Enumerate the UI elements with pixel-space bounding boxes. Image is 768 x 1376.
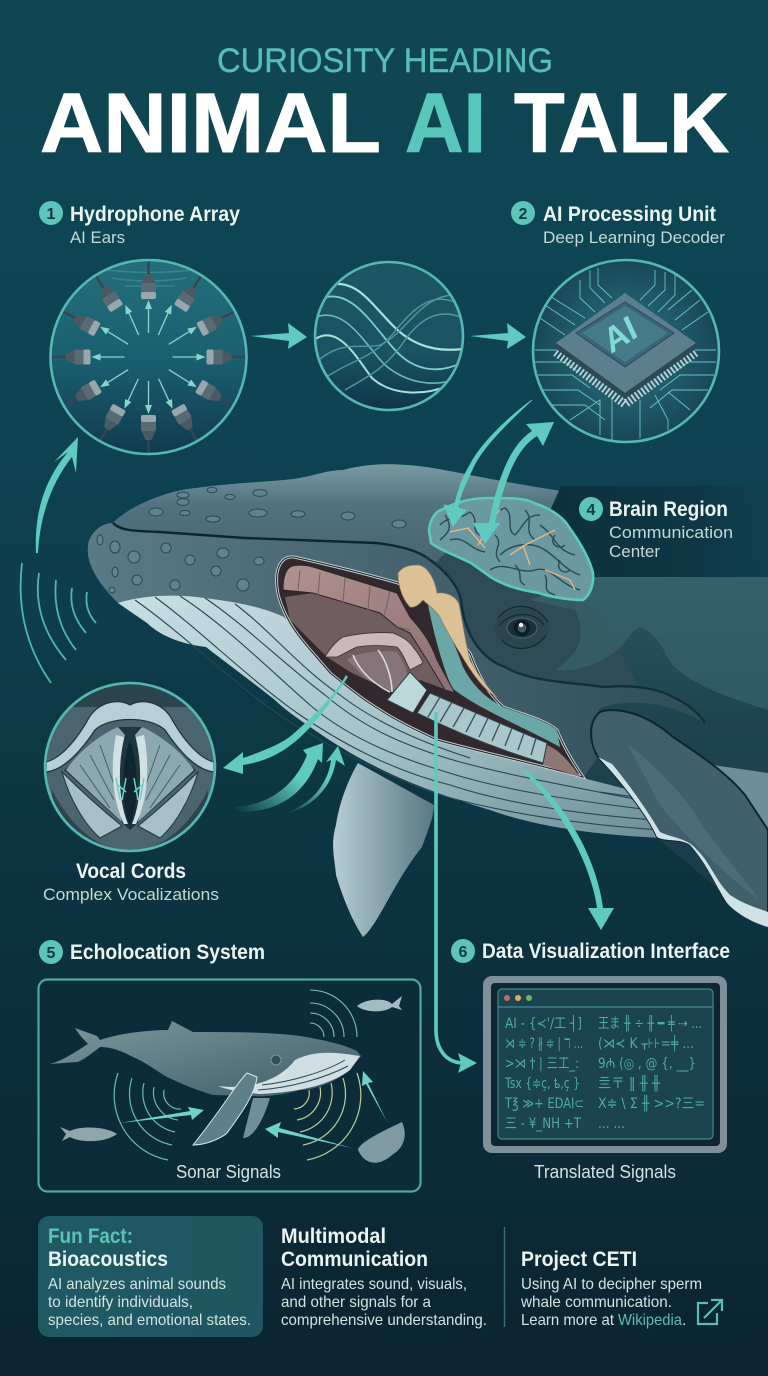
lung pink bbox=[283, 565, 455, 693]
right pleats behind fin bbox=[713, 765, 768, 835]
arrow: trachea to data interface bbox=[436, 712, 462, 1063]
label: vocal cords: Complex Vocalizations bbox=[43, 885, 219, 904]
translated signal glyph rows: Tsx {≑ç, ҍ,ç } bbox=[504, 1076, 580, 1092]
upper jaw bbox=[113, 464, 561, 562]
arrow: vocal cords to whale, thick bbox=[235, 743, 323, 812]
label 4: brain region: 4 bbox=[587, 502, 596, 519]
panel: waveform circle bbox=[314, 262, 463, 410]
translated signal glyph rows: 三 - ¥_NH +T bbox=[505, 1116, 581, 1132]
sonar arcs top bbox=[310, 990, 357, 1037]
label 1: hydrophone array: Hydrophone Array bbox=[70, 203, 240, 226]
label: vocal cords bbox=[43, 860, 219, 904]
teal channel bbox=[427, 600, 560, 747]
eye bbox=[495, 606, 549, 648]
arrow: waveform to processor bbox=[470, 323, 526, 349]
heading: curiosity heading: CURIOSITY HEADING bbox=[217, 42, 553, 80]
text block: multimodal communication: AI integrates sound, visuals, bbox=[281, 1276, 467, 1293]
panel: hydrophone array circle bbox=[50, 260, 246, 454]
vocal folds inside bbox=[325, 632, 423, 670]
head outline band bbox=[426, 557, 705, 723]
label 1: hydrophone array bbox=[39, 201, 240, 247]
text block: project ceti: whale communication. bbox=[520, 1294, 672, 1311]
translated signal glyph rows: ⋊ ≑ ? ∦ ≑ | ℸ ... bbox=[505, 1036, 583, 1052]
arrow: hydrophones to waveform bbox=[251, 323, 307, 349]
text block: multimodal communication: Communication bbox=[281, 1248, 428, 1271]
illustration: whale cross-section bbox=[88, 464, 768, 937]
interior mauve bbox=[285, 593, 455, 693]
sperm whale bbox=[358, 1122, 405, 1163]
brain region bbox=[429, 498, 593, 600]
panel: fun fact bioacoustics: Bioacoustics bbox=[48, 1248, 168, 1271]
text block: project ceti: Using AI to decipher sperm bbox=[521, 1276, 702, 1293]
title: animal ai talk: ANIMAL bbox=[40, 76, 381, 170]
label 1: hydrophone array: AI Ears bbox=[70, 228, 125, 247]
panel: ai chip circle: AI bbox=[598, 308, 643, 362]
lower folds bbox=[347, 651, 407, 690]
panel: echolocation system bbox=[38, 980, 420, 1192]
whale body bbox=[88, 464, 768, 930]
panel: fun fact bioacoustics: AI analyzes animal sounds bbox=[48, 1276, 226, 1293]
caption: translated signals: Translated Signals bbox=[534, 1162, 676, 1182]
label 2: ai processing unit: Deep Learning Decoder bbox=[543, 228, 725, 247]
sonar arcs right bbox=[294, 1073, 361, 1160]
pectoral fin bbox=[591, 710, 768, 927]
text block: project ceti: Learn more at bbox=[521, 1312, 615, 1329]
panel: data visualization screen bbox=[483, 976, 727, 1153]
label 5: echolocation: 5 bbox=[47, 945, 56, 962]
caption: sonar signals: Sonar Signals bbox=[176, 1162, 281, 1182]
fish top bbox=[357, 996, 402, 1011]
arrow: up to whale head bbox=[362, 1071, 387, 1122]
arrow: pleats to data interface bbox=[524, 770, 614, 930]
head side near eye bbox=[426, 530, 640, 690]
label 4: brain region bbox=[579, 497, 733, 561]
lower jaw bbox=[88, 523, 705, 778]
text block: multimodal communication: Multimodal bbox=[281, 1225, 386, 1248]
text block: multimodal communication: and other signals for a bbox=[281, 1294, 431, 1311]
flipper: lower fin bbox=[333, 763, 434, 937]
arrow: whale sound up to hydrophones bbox=[36, 437, 78, 553]
panel: fun fact bioacoustics bbox=[38, 1216, 263, 1337]
text block: multimodal communication bbox=[281, 1225, 487, 1329]
icon: external link bbox=[698, 1300, 722, 1324]
tubercles bbox=[97, 487, 406, 593]
title: animal ai talk: AI bbox=[405, 76, 486, 170]
cutaway cavity bbox=[277, 557, 583, 777]
arrow: fish to whale bbox=[120, 1107, 204, 1123]
translated signal glyph rows: AI - {≺'/工 ┤] bbox=[505, 1014, 582, 1032]
translated signal glyph rows: 9₼ (◎ , @ {, __} bbox=[598, 1056, 696, 1072]
text block: project ceti bbox=[520, 1248, 702, 1329]
sonar arcs left bbox=[114, 1073, 181, 1160]
right body shading bbox=[530, 577, 768, 710]
pleat lines bbox=[135, 596, 660, 830]
translated signal glyph rows bbox=[504, 1014, 705, 1132]
arrow: chip to brain, thin bbox=[444, 400, 532, 526]
label 6: data visualization interface: Data Visualization Interface bbox=[482, 940, 730, 963]
panel: fun fact bioacoustics: species, and emotional states. bbox=[48, 1312, 251, 1329]
panel: fun fact bioacoustics: to identify individuals, bbox=[48, 1294, 193, 1311]
panel: brain label backdrop bbox=[549, 486, 768, 577]
title: animal ai talk: TALK bbox=[514, 76, 729, 170]
label 2: ai processing unit bbox=[511, 201, 725, 247]
translated signal glyph rows: 亖〒 ‖ ╫ ╫ bbox=[598, 1074, 661, 1092]
mouth line bbox=[113, 523, 426, 557]
arrow: vocal cords to whale, thin bbox=[284, 746, 345, 814]
label 1: hydrophone array: 1 bbox=[47, 206, 56, 223]
label 4: brain region: Center bbox=[609, 542, 660, 561]
trachea bbox=[387, 672, 547, 763]
translated signal glyph rows: (⋊≺ K ᚁ⊦⊦=╪ ... bbox=[598, 1034, 694, 1052]
title: animal ai talk bbox=[40, 76, 729, 170]
arrowhead: data interface bbox=[458, 1053, 477, 1073]
text block: project ceti: Project CETI bbox=[521, 1248, 637, 1271]
arrow: larynx to vocal cords, double-headed bbox=[223, 675, 348, 774]
rib lines on lung bbox=[298, 570, 424, 660]
label 6: data visualization interface: 6 bbox=[459, 944, 468, 961]
text block: multimodal communication: comprehensive understanding. bbox=[281, 1312, 487, 1329]
small humpback whale bbox=[50, 1021, 361, 1145]
label 4: brain region: Brain Region bbox=[609, 498, 728, 521]
label 5: echolocation: Echolocation System bbox=[70, 941, 265, 964]
ventral pleats bbox=[118, 596, 662, 838]
panel: fun fact bioacoustics: Fun Fact: bbox=[48, 1225, 133, 1248]
text block: project ceti: Wikipedia bbox=[618, 1312, 682, 1329]
arrow: sperm whale to small whale bbox=[265, 1122, 352, 1148]
translated signal glyph rows: T℥ ≫+ EDAI⊂ bbox=[504, 1096, 584, 1112]
label: vocal cords: Vocal Cords bbox=[76, 860, 186, 883]
text block: project ceti: . bbox=[682, 1312, 686, 1329]
ear structure bbox=[398, 565, 497, 697]
translated signal glyph rows: X≑ \ Σ ╫ >>?三= bbox=[598, 1094, 705, 1112]
arrow: chip to brain, thick bbox=[473, 422, 554, 544]
icon: sound waves from whale head bbox=[21, 563, 96, 683]
translated signal glyph rows: 王ま ╫ ÷ ╫ ━ ╪ ⇢ ... bbox=[598, 1014, 702, 1032]
muscle end bbox=[543, 745, 580, 777]
panel: vocal cords circle bbox=[44, 683, 216, 851]
panel: ai chip circle bbox=[533, 260, 719, 442]
label 2: ai processing unit: 2 bbox=[519, 206, 528, 223]
fish left bbox=[60, 1127, 117, 1141]
label 4: brain region: Communication bbox=[609, 523, 733, 542]
translated signal glyph rows: >⋊ † | 三工_: bbox=[505, 1056, 579, 1072]
translated signal glyph rows: ... ... bbox=[598, 1116, 625, 1132]
label 2: ai processing unit: AI Processing Unit bbox=[543, 203, 716, 226]
